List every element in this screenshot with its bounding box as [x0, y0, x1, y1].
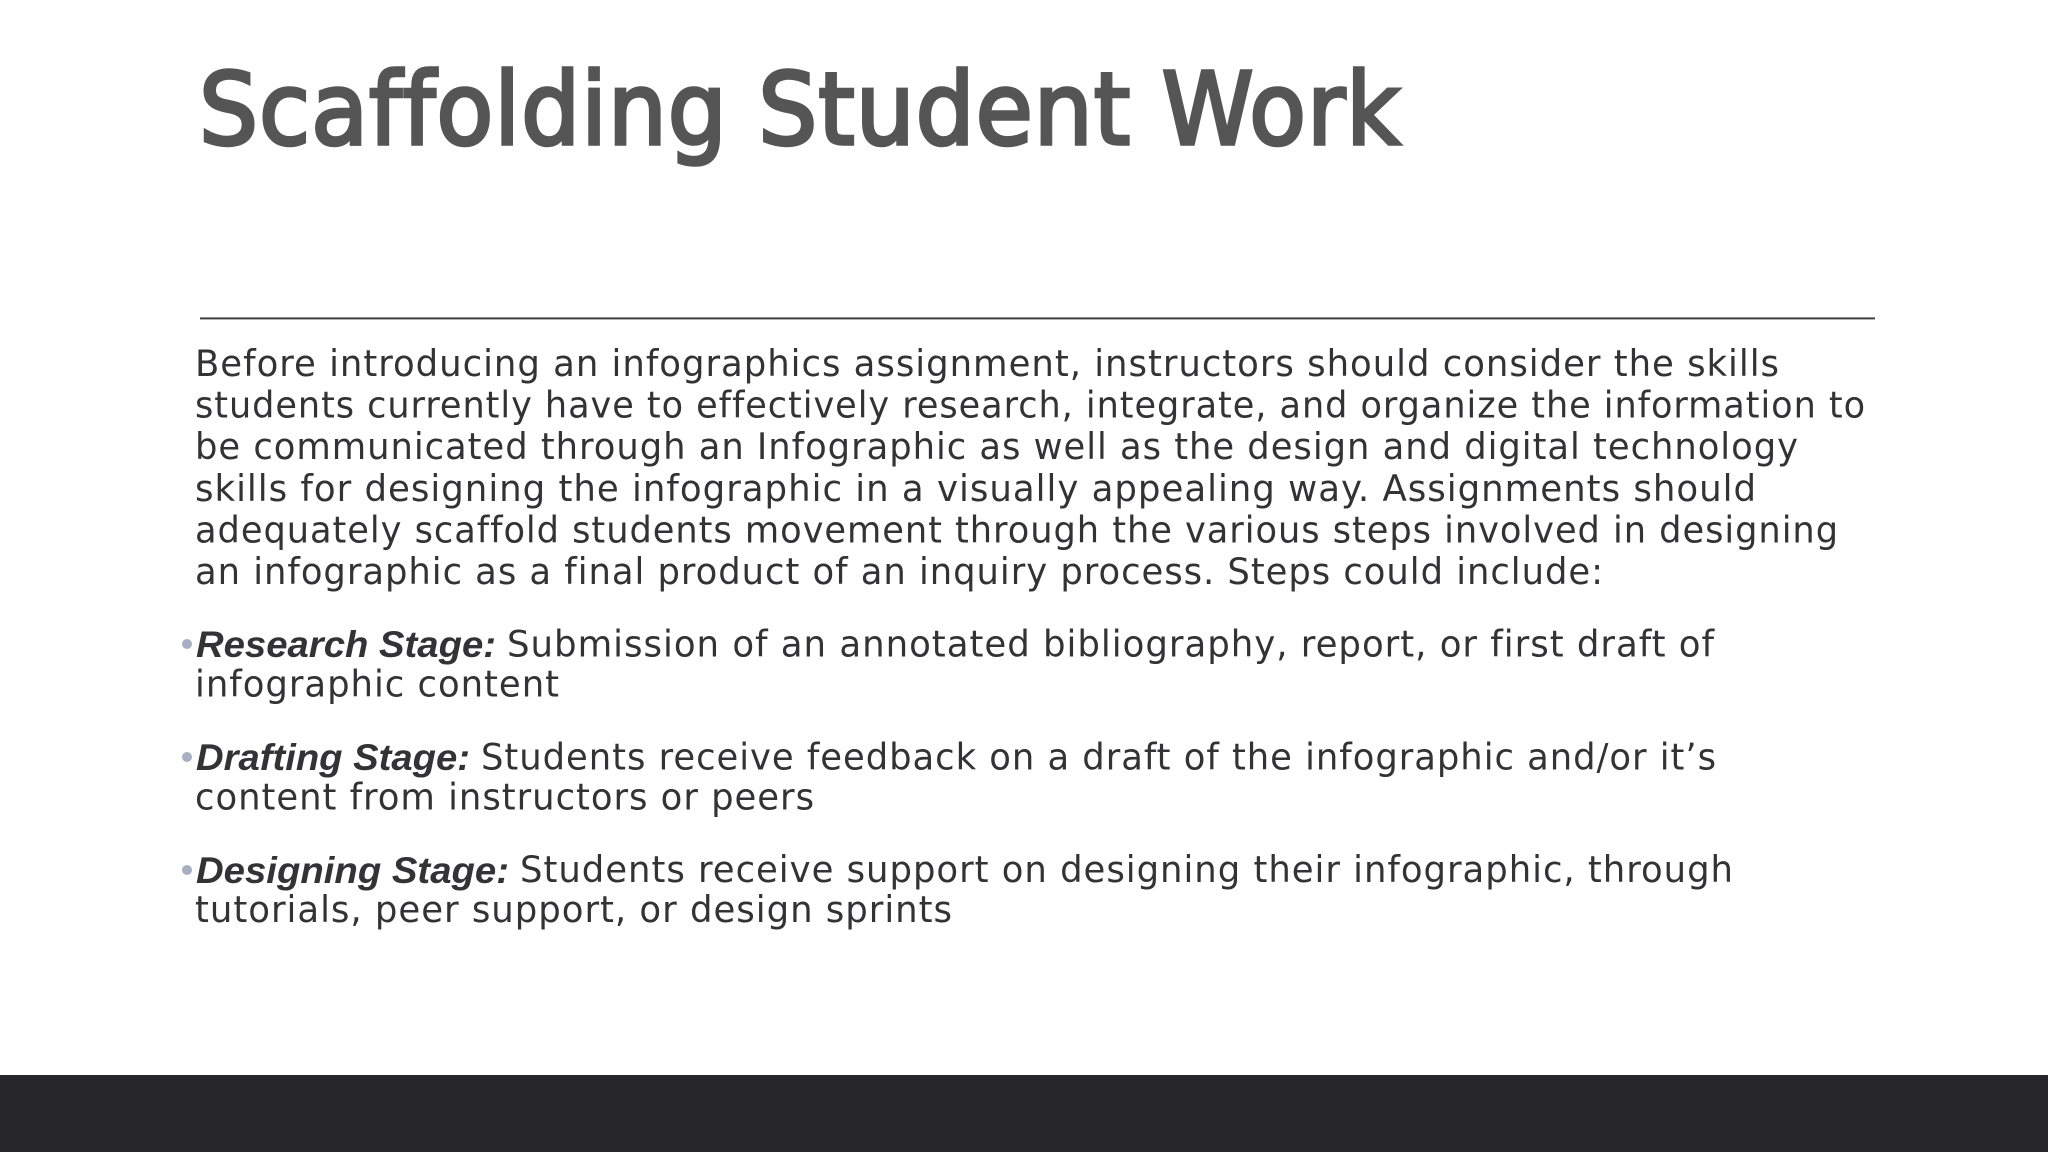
- intro paragraph: be communicated through an Infographic as well as the design and digital technology: [195, 425, 1799, 468]
- bullet: research stage: Research Stage:: [196, 624, 496, 665]
- bullet: drafting stage: [182, 736, 1717, 818]
- intro paragraph: skills for designing the infographic in a visually appealing way. Assignments should: [195, 467, 1757, 510]
- intro paragraph: Before introducing an infographics assignment, instructors should consider the skills: [195, 342, 1780, 385]
- bullet: research stage: infographic content: [195, 662, 560, 706]
- intro paragraph: students currently have to effectively research, integrate, and organize the information to: [195, 384, 1866, 427]
- bullet: research stage: Submission of an annotated bibliography, report, or first draft of: [507, 622, 1715, 666]
- bullet: designing stage: Designing Stage:: [196, 850, 509, 891]
- intro paragraph: [195, 342, 1866, 593]
- bullet: drafting stage: Drafting Stage:: [196, 737, 470, 778]
- bullet: designing stage: [182, 848, 1734, 931]
- bullet: designing stage: Students receive support on designing their infographic, through: [520, 848, 1734, 891]
- bullet: designing stage: tutorials, peer support, or design sprints: [195, 888, 953, 931]
- title: Scaffolding Student Work: [199, 51, 1401, 168]
- bullet: drafting stage: content from instructors or peers: [195, 776, 815, 818]
- intro paragraph: adequately scaffold students movement through the various steps involved in designing: [195, 508, 1839, 552]
- bullet: drafting stage: Students receive feedback on a draft of the infographic and/or it’s: [481, 736, 1717, 778]
- footer bar: [0, 1075, 2048, 1152]
- bullet: research stage: [182, 622, 1715, 706]
- intro paragraph: an infographic as a final product of an inquiry process. Steps could include:: [195, 550, 1604, 593]
